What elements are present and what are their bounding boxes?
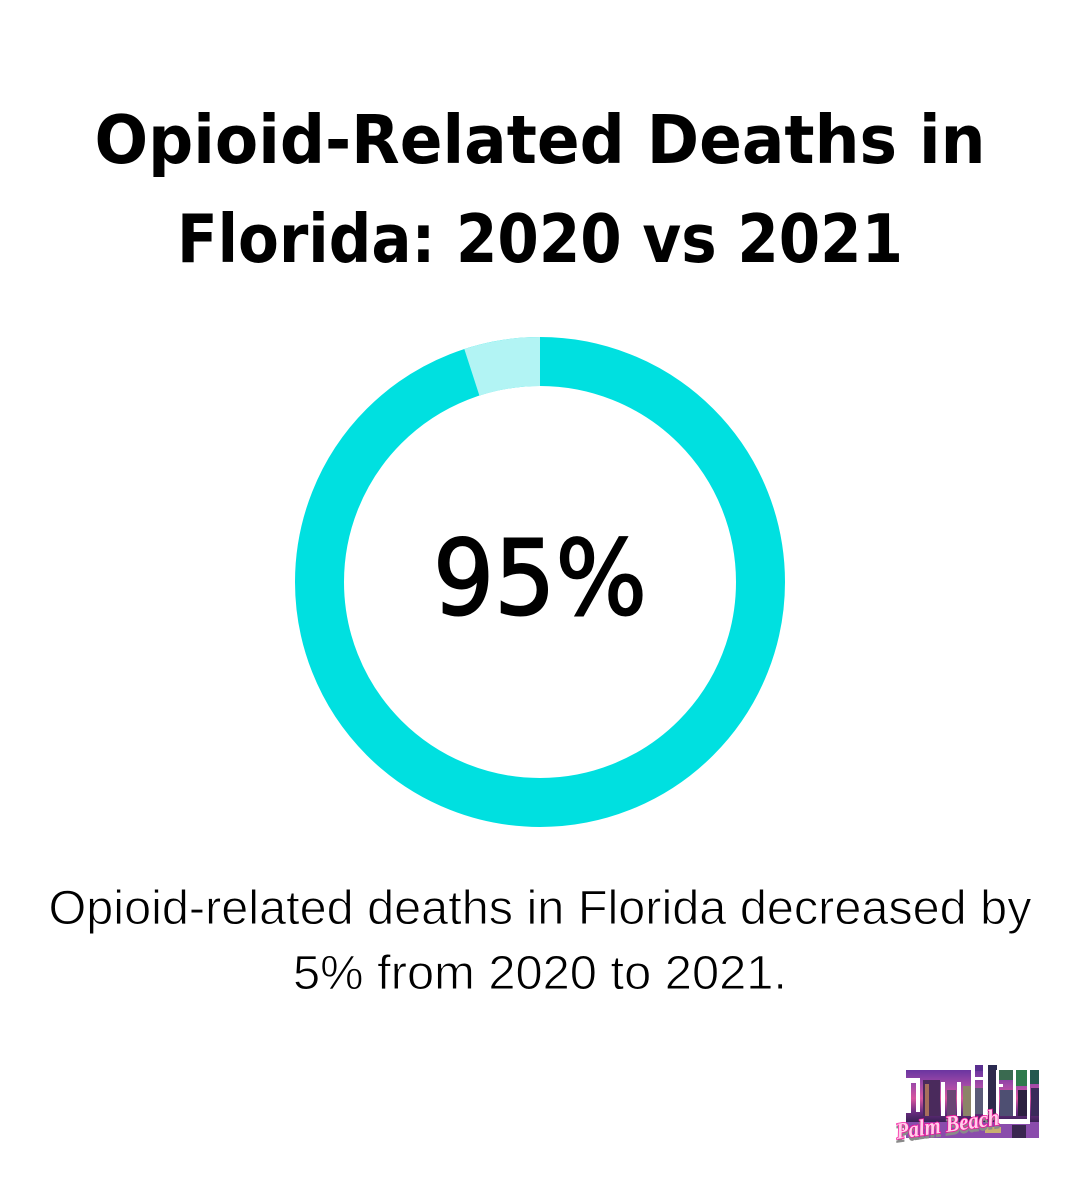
donut value: 95% [433, 519, 647, 639]
caption: Opioid-related deaths in Florida decreased by [48, 882, 1032, 935]
logo script shadow: Palm Beach [893, 1108, 1001, 1147]
logo wordmark cutouts [906, 1065, 1030, 1124]
title [94, 101, 986, 278]
donut chart [320, 337, 760, 802]
title: Opioid-Related Deaths in [94, 101, 986, 179]
logo: amity Palm Beach [893, 1065, 1039, 1147]
caption: 5% from 2020 to 2021. [293, 947, 787, 1000]
logo skyline [906, 1070, 1039, 1138]
logo script: Palm Beach [893, 1105, 1001, 1144]
title: Florida: 2020 vs 2021 [177, 200, 903, 278]
caption [48, 882, 1032, 1000]
